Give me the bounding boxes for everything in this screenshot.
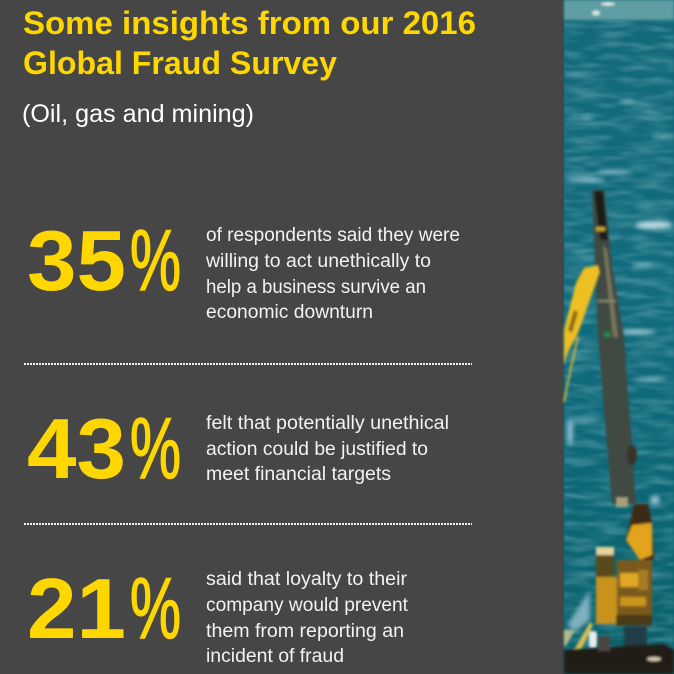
description: them from reporting an	[206, 621, 404, 642]
number: %	[130, 561, 181, 657]
whitecaps	[565, 100, 674, 505]
statistic: 21%	[27, 561, 409, 667]
horizon	[564, 0, 674, 20]
number: 35	[27, 214, 126, 309]
description: meet financial targets	[206, 464, 391, 485]
statistic: 35%	[27, 213, 460, 323]
vessel deck	[564, 636, 674, 674]
crane base	[564, 497, 654, 654]
yellow arm	[564, 265, 600, 402]
number: 21	[27, 562, 126, 657]
photo: offshore crane at sea	[564, 0, 674, 674]
description: economic downturn	[206, 302, 373, 323]
title	[23, 5, 476, 81]
number	[27, 213, 181, 309]
subtitle: (Oil, gas and mining)	[22, 100, 254, 128]
light patch and stripes	[567, 590, 590, 632]
description: said that loyalty to their	[206, 569, 408, 590]
description: felt that potentially unethical	[206, 413, 449, 434]
number: 43	[27, 402, 126, 497]
description: company would prevent	[206, 595, 409, 616]
sea texture	[564, 20, 674, 650]
number	[27, 561, 181, 657]
title: Some insights from our 2016	[23, 5, 476, 41]
description: help a business survive an	[206, 277, 426, 298]
description: incident of fraud	[206, 646, 344, 667]
description: of respondents said they were	[206, 225, 460, 246]
statistic: 43%	[27, 401, 449, 497]
crane boom	[592, 190, 637, 504]
number: %	[130, 213, 181, 309]
description: willing to act unethically to	[205, 251, 431, 272]
number	[27, 401, 181, 497]
description: action could be justified to	[206, 439, 428, 460]
description	[206, 413, 449, 485]
description	[206, 569, 409, 667]
sea	[564, 0, 674, 674]
title: Global Fraud Survey	[23, 45, 337, 81]
number: %	[130, 401, 181, 497]
description	[205, 225, 460, 323]
